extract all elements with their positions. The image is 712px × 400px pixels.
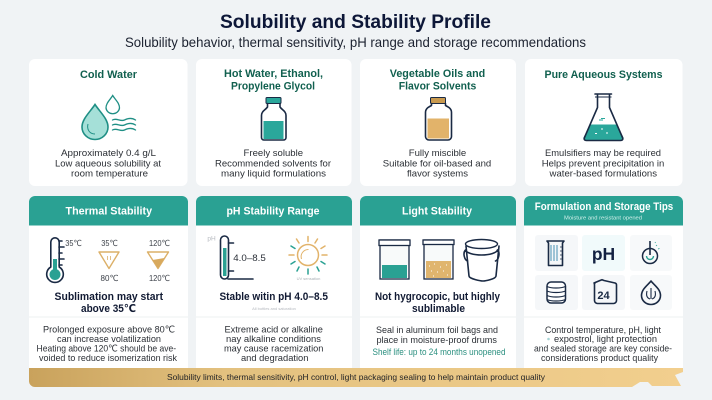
heading: hot water, ethanol, propylene glycol: Hot Water, Ethanol,	[224, 68, 323, 80]
text: formulation notes: and sealed storage are key conside-	[534, 344, 672, 354]
text: thermal notes	[37, 324, 177, 364]
icon: pH gauge: 4.0–8.5	[233, 253, 266, 264]
text: pure aqueous notes	[542, 148, 664, 180]
text: vegetable oils notes: flavor systems	[407, 168, 468, 180]
text: pure aqueous notes: Emulsifiers may be required	[545, 148, 661, 159]
text: pH notes: may cause racemization	[224, 344, 323, 354]
text: pH notes: and degradation	[241, 353, 308, 364]
icon: pH gauge: pH	[207, 236, 216, 242]
text: light notes: Seal in aluminum foil bags and	[376, 325, 498, 336]
heading: cold water: Cold Water	[80, 69, 138, 81]
panel: cold water	[29, 59, 188, 186]
heading: formulation and storage tips: Formulation and Storage Tips	[535, 201, 673, 213]
key message: light stability: sublimable	[412, 303, 465, 315]
key message: sublimation: above 35℃	[81, 303, 136, 315]
text: thermal notes: voided to reduce isomerization risk	[39, 353, 177, 364]
text: hot water notes: many liquid formulations	[221, 168, 326, 180]
heading: pure aqueous systems: Pure Aqueous Systems	[544, 69, 662, 81]
text: pH notes: Extreme acid or alkaline	[224, 324, 323, 336]
text: cold water notes: Approximately 0.4 g/L	[61, 148, 156, 159]
small caption: pH: All bottles and saturation	[252, 306, 296, 311]
icon tile: beaker	[535, 235, 578, 271]
icon tile: pH: pH	[592, 244, 615, 264]
icon: sun	[289, 236, 327, 281]
panel: pH stability range	[196, 196, 352, 368]
heading: pH stability range: pH Stability Range	[226, 206, 320, 218]
icon tile: 24 month tag	[582, 275, 625, 310]
text: pure aqueous notes: Helps prevent precipitation in	[542, 158, 664, 170]
icon tile: drum stack	[535, 275, 578, 310]
text: cold water notes: Low aqueous solubility at	[55, 158, 161, 170]
heading: light stability: Light Stability	[402, 206, 473, 218]
icon: foil bag	[379, 240, 410, 279]
icon: amber bottle	[426, 98, 452, 140]
summary band	[29, 368, 683, 387]
text: vegetable oils notes	[383, 148, 491, 180]
icon: sun: UV sensation	[297, 276, 320, 281]
heading: vegetable oils and flavor solvents: Vegetable Oils and	[390, 68, 485, 80]
text: thermal notes: Heating above 120℃ should be ave-	[37, 344, 176, 354]
text: light notes	[372, 325, 506, 357]
text: pH notes	[224, 324, 323, 364]
text: light notes: Shelf life: up to 24 months unopened	[372, 347, 506, 357]
heading: hot water, ethanol, propylene glycol: Propylene Glycol	[231, 80, 315, 92]
heading: hot water, ethanol, propylene glycol	[224, 68, 323, 92]
text: pH notes: nay alkaline conditions	[226, 334, 321, 345]
icon tile: flame drop	[630, 275, 672, 310]
text: formulation notes: considerations product quality	[541, 353, 658, 364]
small caption: storage tips: Moisture and resistant opened	[564, 216, 642, 222]
key message: pH range: Stable witin pH 4.0–8.5	[219, 291, 328, 303]
heading: vegetable oils and flavor solvents: Flavor Solvents	[399, 80, 476, 92]
icon: flask	[583, 94, 624, 140]
text: formulation notes: Control temperature, pH, light	[545, 325, 661, 336]
key message: light stability	[375, 291, 500, 315]
thermal labels and triangles: 120℃	[149, 238, 170, 248]
text: cold water notes: room temperature	[71, 168, 148, 180]
heading: vegetable oils and flavor solvents	[390, 68, 485, 92]
thermal labels and triangles	[65, 238, 170, 283]
key message: light stability: Not hygrocopic, but highly	[375, 291, 500, 303]
icon tile: 24 month tag: 24	[597, 290, 610, 302]
icon: thermometer	[47, 238, 64, 282]
summary band: Solubility limits, thermal sensitivity, pH control, light packaging sealing to help maintain product quality	[167, 373, 546, 382]
thermal labels and triangles: 80℃	[100, 273, 119, 283]
text: light notes: place in moisture-proof drums	[376, 335, 497, 346]
text: cold water notes	[55, 148, 161, 180]
panel: vegetable oils and flavor solvents	[360, 59, 516, 186]
text: vegetable oils notes: Fully miscible	[409, 148, 466, 159]
text: formulation notes: expostrol, light protection	[554, 334, 657, 345]
icon tile: pH	[582, 235, 625, 271]
text: thermal notes: Prolonged exposure above 80℃	[43, 324, 175, 336]
panel: light stability	[360, 196, 516, 368]
icon: drum	[464, 240, 499, 281]
icon: pH gauge	[207, 236, 266, 279]
thermal labels and triangles: 35℃	[101, 238, 118, 248]
icon: teal bottle	[262, 98, 286, 140]
text: formulation notes	[534, 325, 672, 364]
thermal labels and triangles: 35℃	[65, 238, 82, 248]
key message: sublimation	[55, 291, 163, 315]
icon: water drops and waves	[82, 96, 136, 140]
panel: hot water, ethanol, propylene glycol	[196, 59, 352, 186]
text: hot water notes: Freely soluble	[244, 148, 303, 159]
text: pure aqueous notes: water-based formulations	[549, 168, 657, 180]
text: hot water notes	[215, 148, 331, 180]
icon tile: power dial	[630, 235, 672, 271]
panel: pure aqueous systems	[525, 59, 682, 186]
text: vegetable oils notes: Suitable for oil-based and	[383, 158, 491, 170]
heading: thermal stability: Thermal Stability	[66, 206, 153, 218]
panel: thermal stability	[29, 196, 188, 368]
icon: powder bag	[423, 240, 454, 279]
subtitle: Solubility behavior, thermal sensitivity, pH range and storage recommendations	[125, 34, 586, 50]
thermal labels and triangles: 120℃	[149, 273, 170, 283]
text: hot water notes: Recommended solvents for	[215, 158, 331, 170]
key message: sublimation: Sublimation may start	[55, 291, 163, 303]
panel: formulation and storage tips	[524, 196, 683, 368]
text: thermal notes: can increase volatilization	[57, 334, 161, 345]
title: Solubility and Stability Profile	[220, 12, 491, 33]
